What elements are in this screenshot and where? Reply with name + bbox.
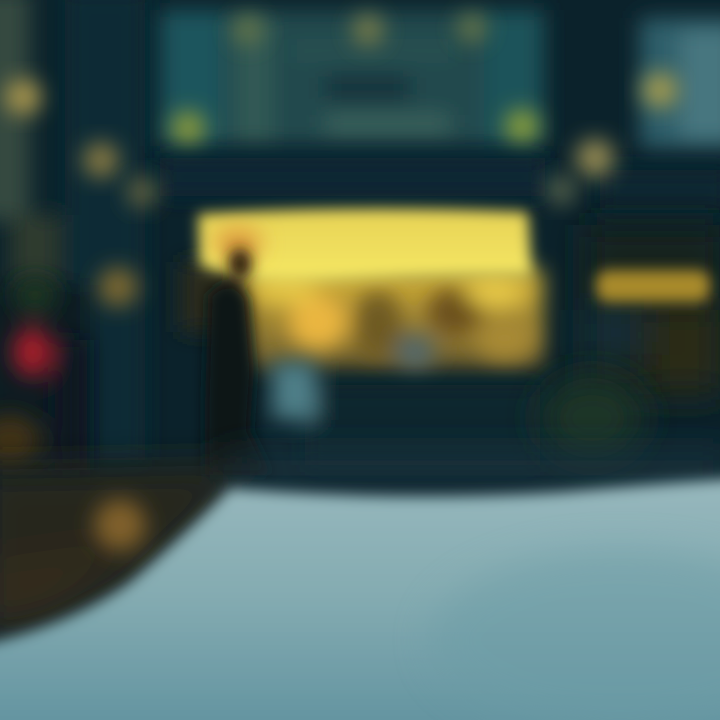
light: right small bbox=[546, 175, 576, 205]
awning orange highlight bbox=[214, 228, 262, 258]
upper window lights bbox=[171, 13, 539, 145]
pavement glow reflection bbox=[94, 499, 146, 551]
light: left small bbox=[126, 176, 158, 208]
lower right shading bbox=[430, 550, 720, 720]
street lights bbox=[5, 72, 678, 307]
light: far left bbox=[5, 79, 41, 115]
red figure at left bbox=[0, 277, 87, 470]
light: right window bbox=[642, 72, 678, 108]
light: right upper bbox=[576, 139, 614, 177]
lower shop wall bbox=[272, 362, 540, 465]
shop window display items bbox=[251, 278, 535, 370]
silhouetted person bbox=[205, 248, 272, 475]
bush bbox=[540, 376, 644, 460]
upper window bbox=[160, 10, 544, 146]
right window bbox=[640, 18, 720, 148]
pavement: left dark ground bbox=[0, 455, 720, 640]
light: left lower bbox=[98, 267, 138, 307]
left wall strip bbox=[0, 0, 145, 475]
right hanging sign bbox=[596, 270, 710, 302]
shop window interior bbox=[180, 262, 543, 368]
right shop front bbox=[585, 225, 720, 395]
light: left upper bbox=[83, 142, 119, 178]
dark fascia band bbox=[160, 158, 720, 210]
yellow awning bbox=[198, 208, 532, 282]
pale blue foreground surface bbox=[0, 478, 720, 720]
